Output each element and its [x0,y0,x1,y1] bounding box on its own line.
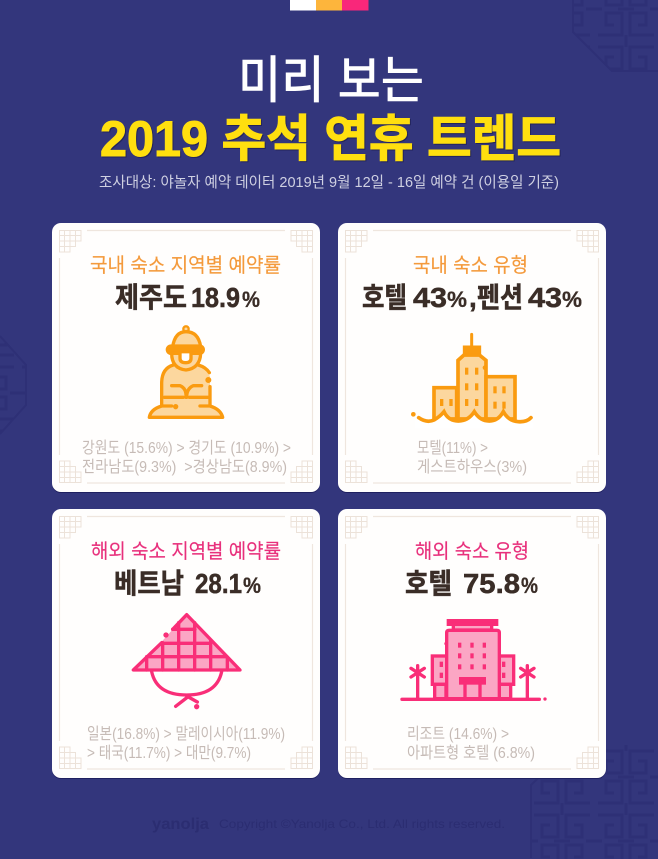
subtitle: 조사대상: 야놀자 예약 데이터 2019년 9월 12일 - 16일 예약 건 (이용일 기준) [99,174,559,191]
panel: domestic accommodation types [338,223,606,493]
headline figure [362,282,582,313]
headline figure: 75.8 [463,568,520,599]
headline figure: % [243,573,261,598]
headline figure: 펜션 [477,282,523,313]
ranking text [82,439,291,476]
ranking text: > 태국(11.7%) > 대만(9.7%) [87,744,251,762]
headline figure: 43 [413,282,447,313]
footer [152,816,505,833]
footer logo: yanolja [152,816,209,833]
icon: dol hareubang statue [149,326,223,417]
panel: overseas accommodation types [338,509,606,779]
ranking text: 전라남도(9.3%) >경상남도(8.9%) [82,458,287,476]
headline figure: 43 [528,282,562,313]
icon: conical hat [133,615,240,708]
headline figure: 28.1 [195,568,242,599]
background lattice ornament: bottom right [530,745,658,859]
panel heading: 국내 숙소 지역별 예약률 [90,254,281,277]
ranking text: 게스트하우스(3%) [417,458,527,476]
headline figure [405,568,538,599]
footer copyright: Copyright ©Yanolja Co., Ltd. All rights reserved. [219,817,505,831]
headline figure: % [562,287,582,312]
headline figure: % [447,287,467,312]
panel heading: 국내 숙소 유형 [413,254,528,277]
ranking text [87,725,285,762]
headline figure [115,282,260,313]
headline figure: % [521,573,538,598]
ranking text: 강원도 (15.6%) > 경기도 (10.9%) > [82,439,291,457]
icon: waterfront buildings [411,334,533,428]
panel heading: 해외 숙소 유형 [415,540,529,563]
background lattice ornament: left [0,335,27,435]
headline figure: , [469,282,477,313]
ranking text: 일본(16.8%) > 말레이시아(11.9%) [87,725,285,743]
ranking text: 모텔(11%) > [417,439,488,457]
ranking text: 아파트형 호텔 (6.8%) [407,744,535,762]
ranking text: 리조트 (14.6%) > [407,725,509,743]
panel heading: 해외 숙소 지역별 예약률 [91,540,281,563]
headline figure: 베트남 [114,568,184,599]
panel: overseas regions [52,509,320,779]
headline figure: 제주도 [115,282,187,313]
background lattice ornament: top right [572,0,658,72]
headline figure: 호텔 [405,568,452,599]
headline figure: 호텔 [362,282,407,313]
title line 1: 미리 보는 [238,39,424,113]
ranking text [417,439,527,476]
colour bar [290,0,368,10]
headline figure: 18.9 [191,282,240,313]
panel: domestic regions [52,223,320,493]
title [100,39,561,167]
ranking text [407,725,535,762]
icon: hotel with palm trees [402,621,547,701]
headline figure: % [242,287,260,312]
title line 2: 2019 추석 연휴 트렌드 [100,111,561,167]
headline figure [114,568,261,599]
